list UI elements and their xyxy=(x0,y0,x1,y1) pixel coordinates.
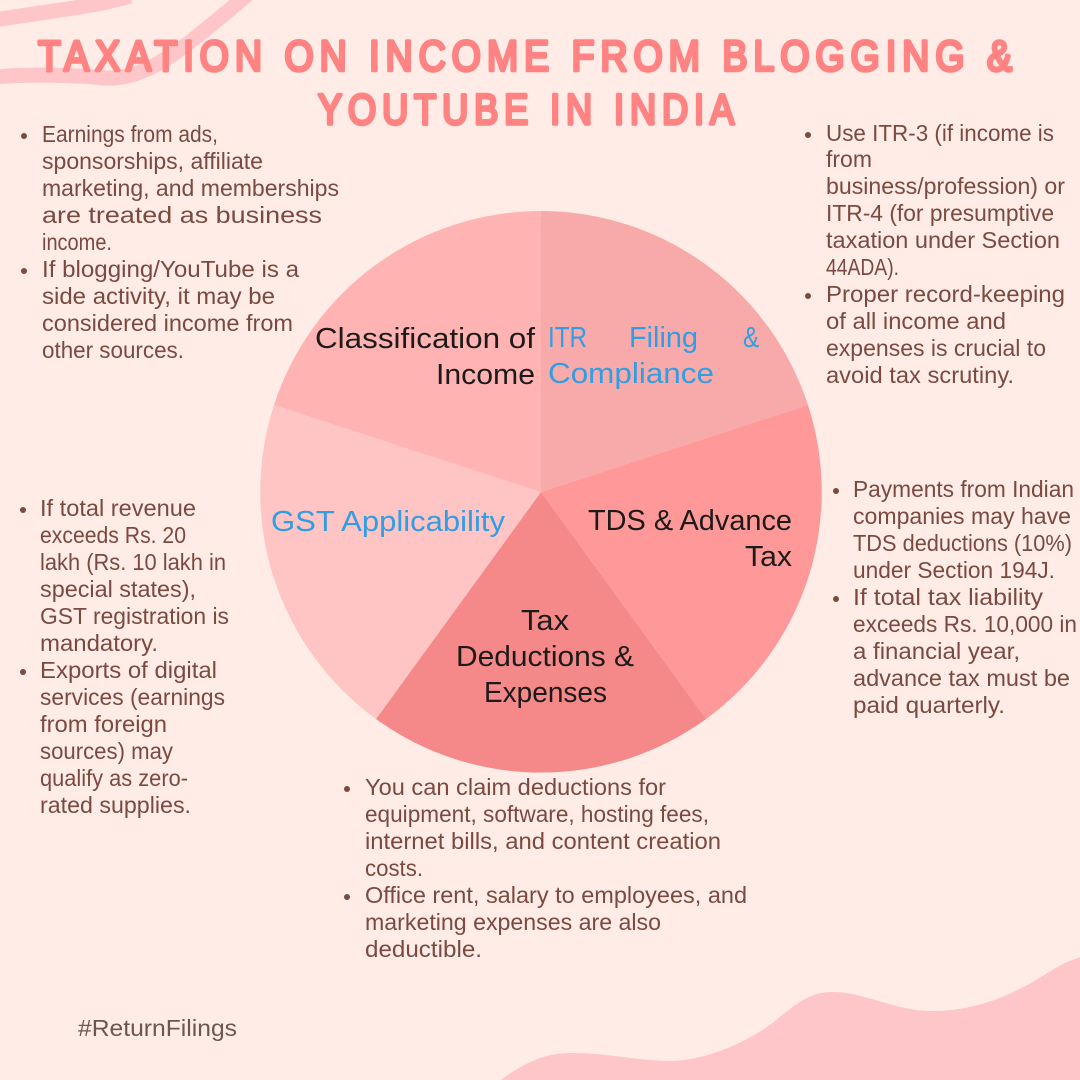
decoration: top-left ribbons xyxy=(0,0,248,78)
text block: TDS details xyxy=(833,476,1077,718)
text block: GST details: rated supplies. xyxy=(40,792,191,818)
text block: TDS details: under Section 194J. xyxy=(853,557,1055,583)
text block: classification details xyxy=(21,121,339,363)
text block: ITR details xyxy=(805,120,1065,388)
text block: classification details: If blogging/YouTube is a xyxy=(42,256,299,282)
label: tax deductions and expenses: Expenses xyxy=(484,677,607,709)
label: TDS and advance tax xyxy=(588,505,793,573)
text block: deductions details: Office rent, salary to employees, and xyxy=(365,882,747,908)
title xyxy=(38,32,1018,134)
title: YOUTUBE IN INDIA xyxy=(318,86,740,134)
label: GST applicability: GST Applicability xyxy=(271,506,506,538)
text block: ITR details: expenses is crucial to xyxy=(826,335,1046,361)
text block: deductions details: marketing expenses are also xyxy=(365,909,661,935)
label: classification of income: Classification of xyxy=(315,323,536,355)
text block: GST details: If total revenue xyxy=(40,495,196,521)
text block: classification details: sponsorships, affiliate xyxy=(42,148,263,174)
text block: GST details: from foreign xyxy=(40,711,167,737)
text block: ITR details: avoid tax scrutiny. xyxy=(826,362,1014,388)
text block: classification details: side activity, it may be xyxy=(42,283,275,309)
text block: deductions details xyxy=(344,774,747,962)
text block: TDS details: Payments from Indian xyxy=(853,476,1074,502)
text block: TDS details: paid quarterly. xyxy=(853,692,1005,718)
text block: classification details: are treated as business xyxy=(42,202,322,228)
text block: classification details: marketing, and memberships xyxy=(42,175,339,201)
label: TDS and advance tax: Tax xyxy=(745,541,793,573)
text block: classification details: considered income from xyxy=(42,310,293,336)
text block: TDS details: If total tax liability xyxy=(853,584,1044,610)
slice: ITR filing xyxy=(541,211,808,492)
text block: TDS details: companies may have xyxy=(853,503,1071,529)
text block: GST details: exceeds Rs. 20 xyxy=(40,522,186,548)
text block: GST details: qualify as zero- xyxy=(40,765,188,791)
text block: GST details: GST registration is xyxy=(40,603,229,629)
label: ITR filing and compliance: Filing xyxy=(629,322,698,354)
text block: classification details: Earnings from ads, xyxy=(42,121,218,147)
text block: deductions details: equipment, software, hosting fees, xyxy=(365,801,709,827)
slice: classification xyxy=(274,211,541,492)
text block: ITR details: business/profession) or xyxy=(826,173,1065,199)
label: ITR filing and compliance: ITR xyxy=(548,322,587,354)
text block: TDS details: advance tax must be xyxy=(853,665,1070,691)
text block: TDS details: TDS deductions (10%) xyxy=(853,530,1072,556)
label: tax deductions and expenses: Deductions & xyxy=(456,641,634,673)
text block: GST details: mandatory. xyxy=(40,630,158,656)
slice: GST xyxy=(260,405,541,719)
text block: classification details: income. xyxy=(42,229,112,255)
text block: TDS details: exceeds Rs. 10,000 in xyxy=(853,611,1077,637)
label: classification of income xyxy=(315,323,536,391)
text block: deductions details: You can claim deductions for xyxy=(365,774,666,800)
text block: GST details: lakh (Rs. 10 lakh in xyxy=(40,549,226,575)
label: ITR filing and compliance xyxy=(548,322,759,390)
label: tax deductions and expenses xyxy=(456,605,634,709)
text block: ITR details: Proper record-keeping xyxy=(826,281,1065,307)
slice: tax deductions xyxy=(376,492,706,773)
text block: GST details: special states), xyxy=(40,576,196,602)
label: tax deductions and expenses: Tax xyxy=(521,605,570,637)
decoration: bottom-right wave xyxy=(498,957,1080,1080)
text block: ITR details: from xyxy=(826,146,872,172)
hashtag: #ReturnFilings xyxy=(78,1015,237,1041)
text block: ITR details: taxation under Section xyxy=(826,227,1060,253)
slice: TDS and advance tax xyxy=(541,405,822,719)
text block: deductions details: costs. xyxy=(365,855,423,881)
text block: deductions details: deductible. xyxy=(365,936,482,962)
text block: ITR details: ITR-4 (for presumptive xyxy=(826,200,1054,226)
text block: TDS details: a financial year, xyxy=(853,638,1020,664)
text block: ITR details: of all income and xyxy=(826,308,1006,334)
text block: deductions details: internet bills, and content creation xyxy=(365,828,721,854)
label: classification of income: Income xyxy=(436,359,535,391)
text block: classification details: other sources. xyxy=(42,337,184,363)
text block: GST details: sources) may xyxy=(40,738,173,764)
text block: GST details: services (earnings xyxy=(40,684,225,710)
label: ITR filing and compliance: & xyxy=(743,322,759,354)
pie chart xyxy=(260,211,822,773)
text block: ITR details: Use ITR-3 (if income is xyxy=(826,120,1054,146)
text block: GST details: Exports of digital xyxy=(40,657,217,683)
label: ITR filing and compliance: Compliance xyxy=(548,358,714,390)
label: TDS and advance tax: TDS & Advance xyxy=(588,505,792,537)
text block: GST details xyxy=(20,495,229,818)
text block: ITR details: 44ADA). xyxy=(826,254,899,280)
